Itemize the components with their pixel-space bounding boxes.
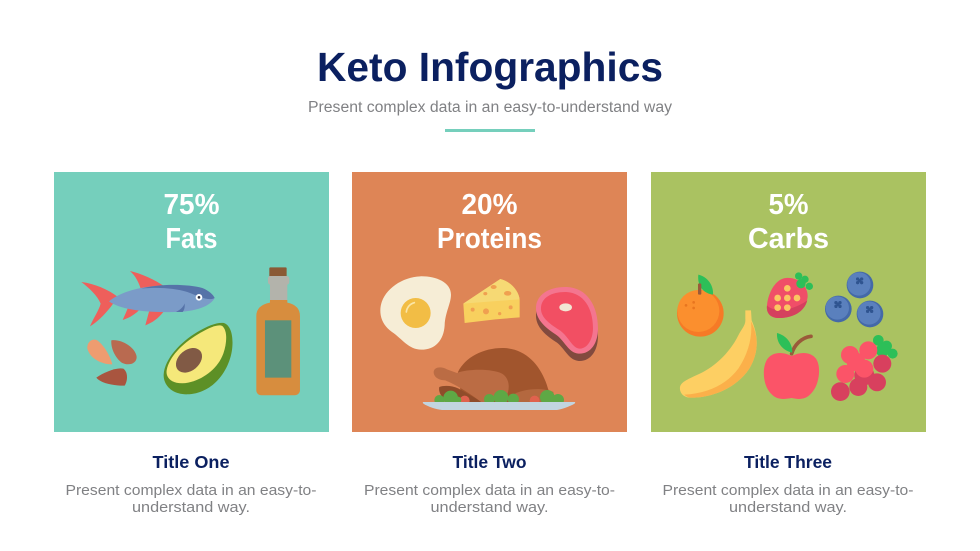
heading: 5% Carbs: 5% [768, 189, 809, 221]
icon: almonds [87, 340, 137, 386]
icon: oil bottle [256, 267, 300, 395]
icon: avocado [164, 323, 233, 394]
carbs illustrations [677, 272, 898, 401]
fats illustrations [81, 267, 300, 395]
text block: title two [364, 452, 615, 516]
accent underline [445, 129, 535, 132]
heading: 20% Proteins: 20% [462, 189, 518, 221]
icon: strawberry [767, 272, 813, 318]
text block: title two: Title Two [452, 452, 526, 472]
icon: roast turkey on plate [423, 348, 575, 410]
icon: apple [764, 333, 819, 399]
text block: title one: understand way. [132, 499, 250, 516]
text block: title two: Present complex data in an easy-to- [364, 482, 615, 499]
icon: banana [680, 310, 757, 398]
proteins illustrations [380, 276, 598, 410]
heading: 75% Fats: Fats [166, 223, 218, 255]
heading: 75% Fats: 75% [164, 189, 220, 221]
panel: proteins [352, 172, 627, 432]
text block: title one [66, 452, 317, 516]
heading: 5% Carbs: Carbs [748, 223, 829, 255]
heading: 5% Carbs [748, 189, 829, 255]
heading: 20% Proteins [437, 189, 542, 255]
heading: 75% Fats [164, 189, 220, 255]
icon: fish [81, 271, 215, 326]
panel: carbs [651, 172, 926, 432]
title: Keto Infographics [317, 44, 663, 90]
text block: title three: Present complex data in an easy-to- [662, 482, 914, 499]
text block: title three: understand way. [729, 499, 847, 516]
text block: title three [662, 452, 914, 516]
icon: fried egg [380, 276, 451, 350]
icon: blueberries [825, 272, 883, 327]
subtitle: Present complex data in an easy-to-understand way [308, 99, 672, 116]
text block: title three: Title Three [744, 452, 832, 472]
text block: title one: Present complex data in an easy-to- [66, 482, 317, 499]
icon: grapes [831, 335, 898, 401]
text block: title one: Title One [152, 452, 230, 472]
heading: 20% Proteins: Proteins [437, 223, 542, 255]
text block: title two: understand way. [430, 499, 548, 516]
icon: steak [536, 287, 598, 361]
icon: orange [677, 275, 724, 337]
icon: cheese [463, 279, 520, 323]
panel: fats [54, 172, 329, 432]
